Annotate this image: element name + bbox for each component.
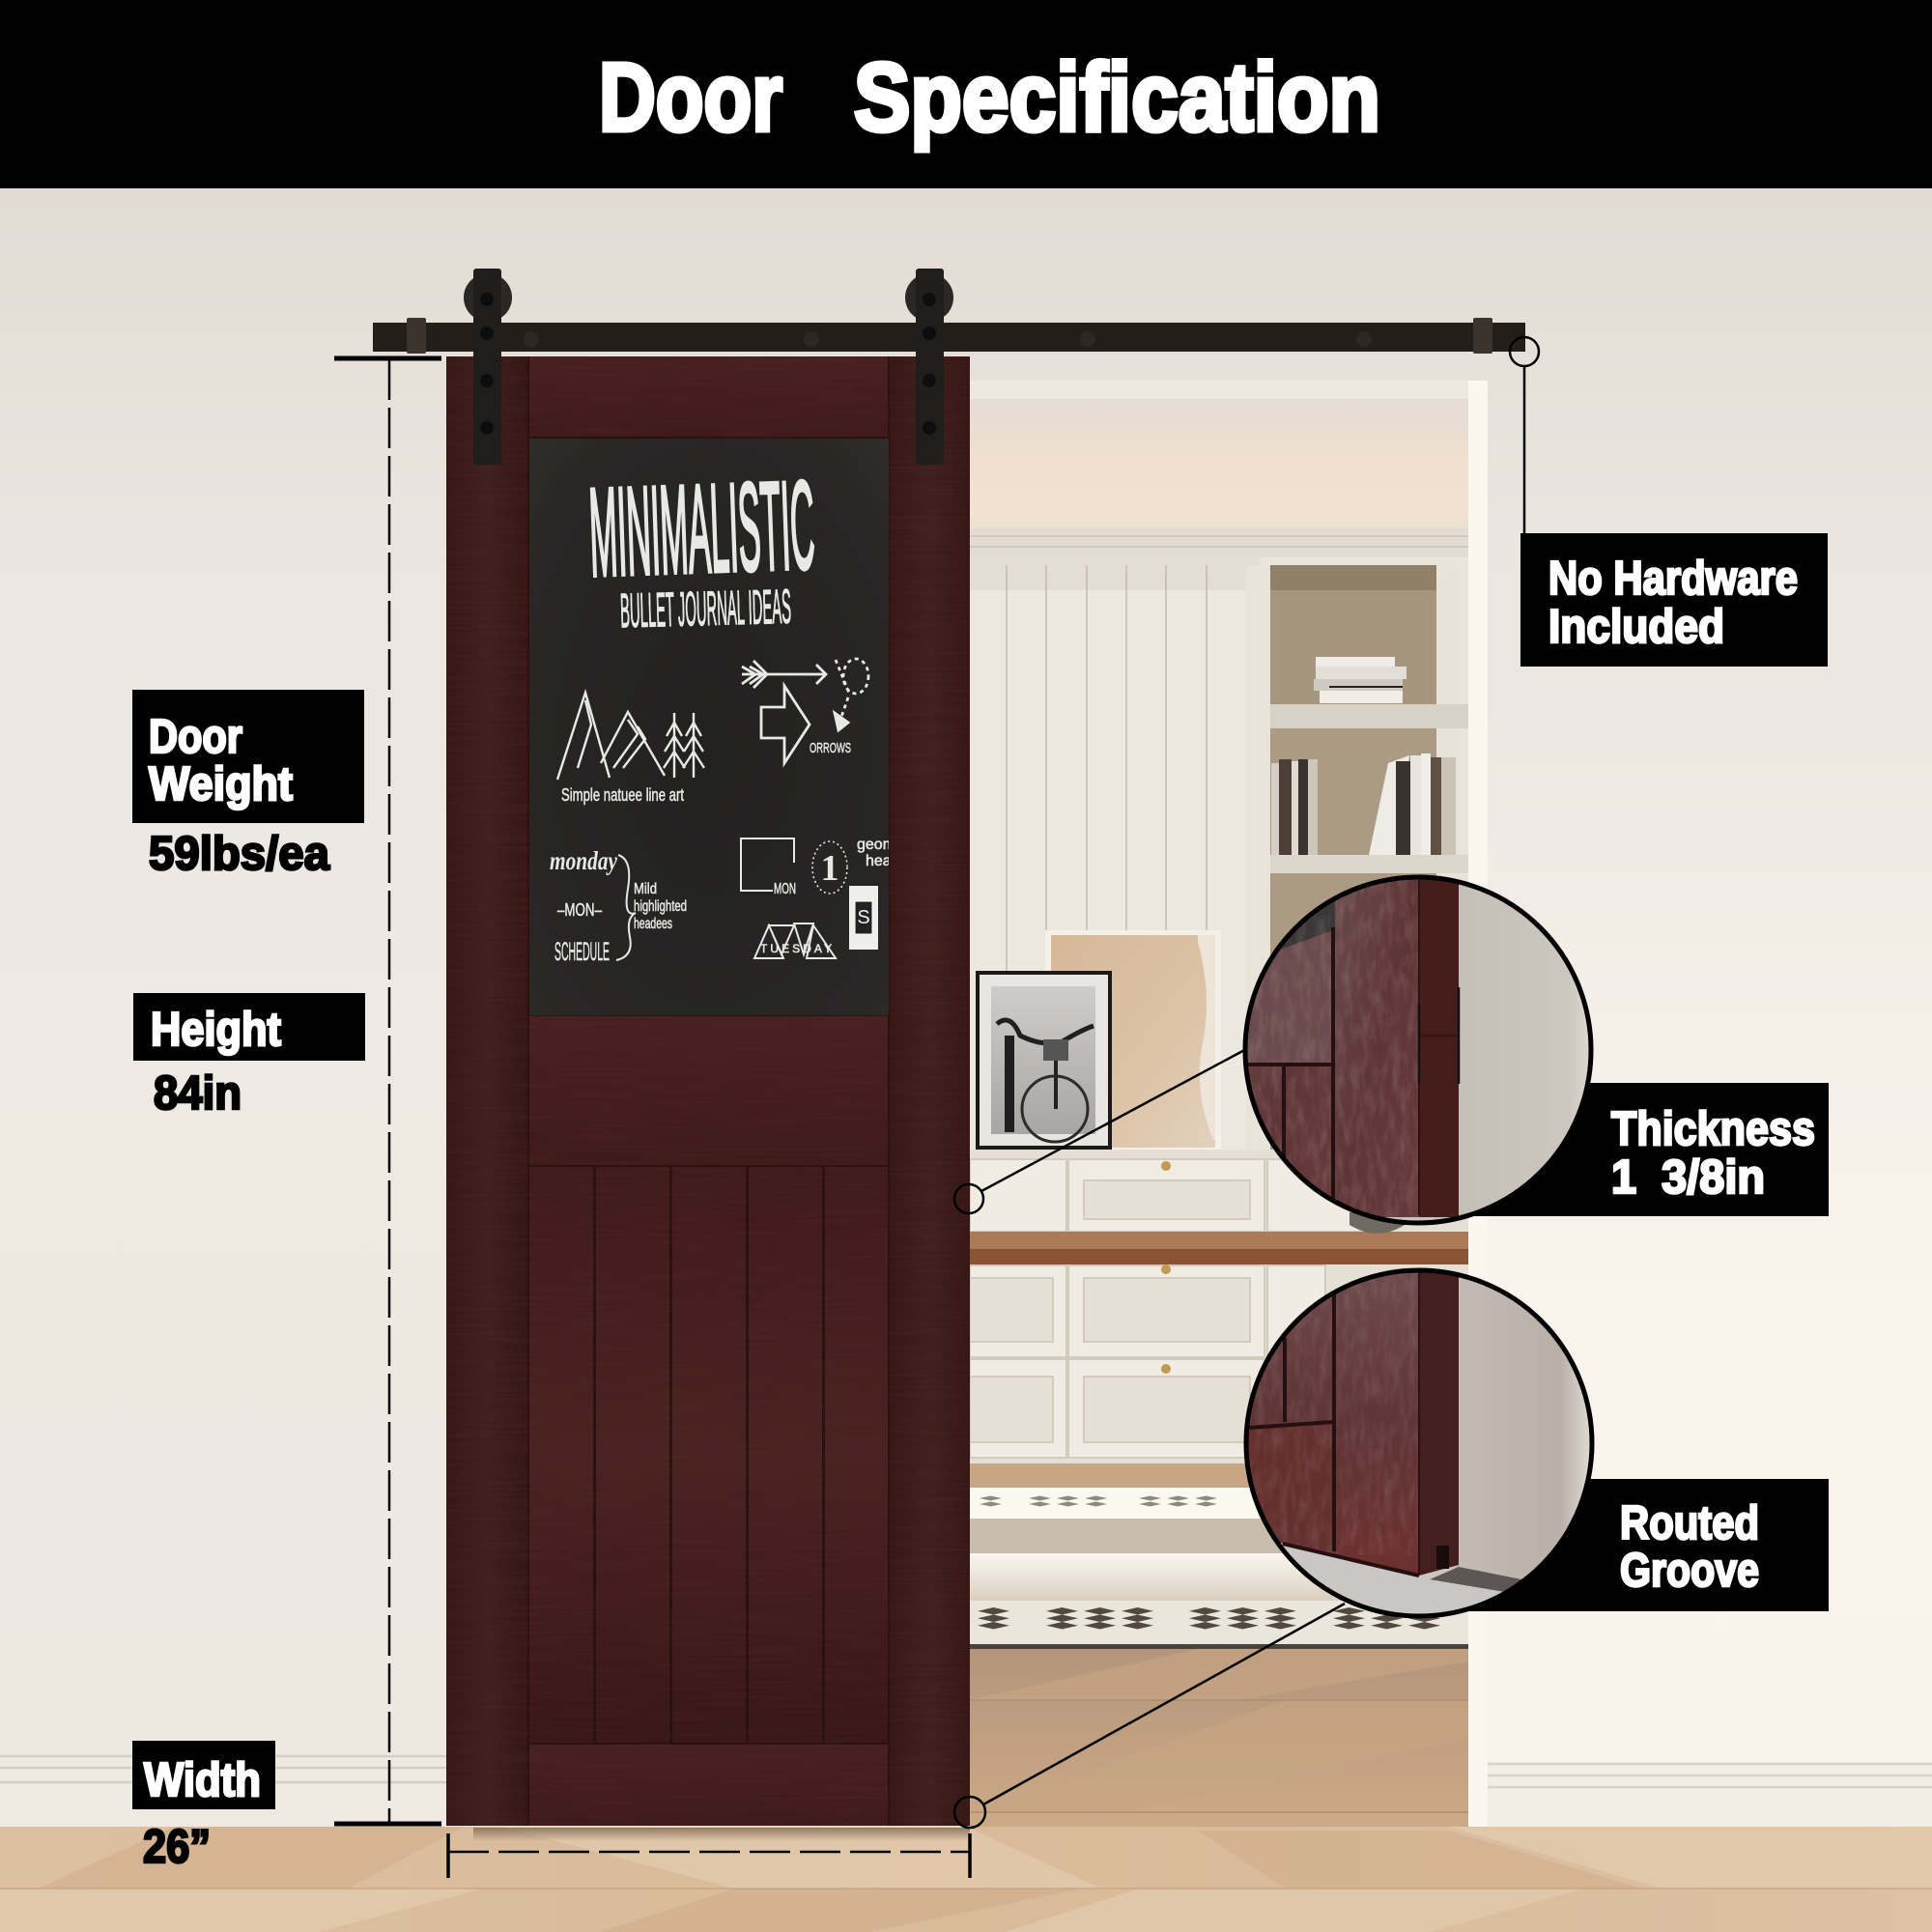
chalk number one xyxy=(812,841,847,894)
label: routed groove: Groove xyxy=(1620,1545,1759,1597)
value: height: 84in xyxy=(154,1067,242,1120)
bottom rail xyxy=(529,1745,888,1826)
detail circle: routed groove xyxy=(1245,1265,1604,1623)
chalk nature caption: Simple natuee line art xyxy=(561,785,684,805)
height dimension line xyxy=(334,358,441,1824)
chalk brace xyxy=(616,855,636,960)
baseboards xyxy=(0,1756,1932,1827)
door stiles xyxy=(446,356,970,1826)
callout line: thickness xyxy=(954,1048,1248,1213)
books xyxy=(1271,657,1456,855)
label: thickness: Thickness xyxy=(1611,1103,1815,1155)
chalk highlighted headers note: headees xyxy=(634,916,672,932)
framed bicycle photo xyxy=(976,971,1112,1150)
chalk S block: S xyxy=(857,907,870,928)
rug and floor xyxy=(970,1463,1468,1827)
chalkboard panel: SCHEDULE xyxy=(554,937,610,966)
label: height: Height xyxy=(151,1004,281,1056)
ceiling cove and crown moulding xyxy=(970,381,1468,557)
left hanger xyxy=(464,269,512,465)
label: routed groove xyxy=(1449,1479,1829,1611)
chalk monday script: monday xyxy=(550,846,618,875)
label: width: Width xyxy=(144,1754,261,1806)
label: routed groove: Routed xyxy=(1620,1497,1759,1549)
label: no hardware included xyxy=(1520,533,1828,667)
label: height xyxy=(133,993,365,1061)
detail circle: thickness xyxy=(1245,869,1604,1223)
chalk mon box: MON xyxy=(774,881,796,897)
door jamb xyxy=(1468,381,1488,1827)
title: Specification xyxy=(854,43,1380,152)
wall panelling xyxy=(970,557,1260,1156)
chalk geometric caption xyxy=(857,840,889,866)
barn door xyxy=(446,356,970,1826)
callout line: groove xyxy=(954,1604,1345,1828)
value: width: 26” xyxy=(143,1821,211,1873)
label: no hardware included: No Hardware xyxy=(1548,553,1798,605)
label: door weight xyxy=(132,690,364,823)
chalk highlighted headers note xyxy=(634,882,686,929)
chalkboard panel xyxy=(529,439,924,1015)
chalk arrows caption: ORROWS xyxy=(810,740,851,756)
chalk tuesday banner: TUESDAY xyxy=(760,942,832,955)
right hanger xyxy=(905,269,953,465)
title xyxy=(599,43,1380,152)
chalk highlighted headers note: highlighted xyxy=(634,898,687,915)
label: width xyxy=(132,1741,275,1809)
chalk geometric caption: headers xyxy=(866,853,922,869)
floor xyxy=(0,1827,1932,1932)
chalk tuesday banner xyxy=(754,923,836,958)
bookcase xyxy=(1246,565,1468,1154)
sliding rail xyxy=(373,318,1525,354)
label: thickness xyxy=(1449,1083,1829,1216)
chalk geometric caption: geometric xyxy=(857,837,924,853)
plank panels xyxy=(529,1167,888,1743)
infographic canvas: MINIMALISTIC xyxy=(587,454,817,603)
header band xyxy=(0,0,1932,188)
label: thickness: 1 3/8in xyxy=(1611,1151,1765,1204)
chalk mon header: –MON– xyxy=(557,900,602,920)
chalkboard panel: BULLET JOURNAL IDEAS xyxy=(619,580,792,638)
callout line: hardware xyxy=(1510,337,1539,533)
chalk arrows xyxy=(742,659,868,763)
top rail xyxy=(529,356,888,437)
room seen through the doorway xyxy=(970,381,1488,1827)
label: no hardware included: Included xyxy=(1548,601,1724,653)
label: door weight: Weight xyxy=(149,758,293,810)
label: door weight: Door xyxy=(149,711,242,763)
chalk mountains and trees xyxy=(557,693,704,780)
chalk highlighted headers note: Mild xyxy=(634,881,657,897)
title: Door xyxy=(599,43,782,152)
middle rail xyxy=(529,1016,888,1165)
cabinet and drawers xyxy=(970,1150,1468,1468)
wooden counter xyxy=(970,1212,1468,1264)
width dimension line xyxy=(448,1833,970,1878)
chalk mon box xyxy=(741,838,796,897)
value: door weight: 59lbs/ea xyxy=(149,828,330,880)
chalk number one: 1 xyxy=(821,848,838,889)
leaning artwork xyxy=(1045,930,1221,1151)
chalk S block xyxy=(849,886,878,950)
